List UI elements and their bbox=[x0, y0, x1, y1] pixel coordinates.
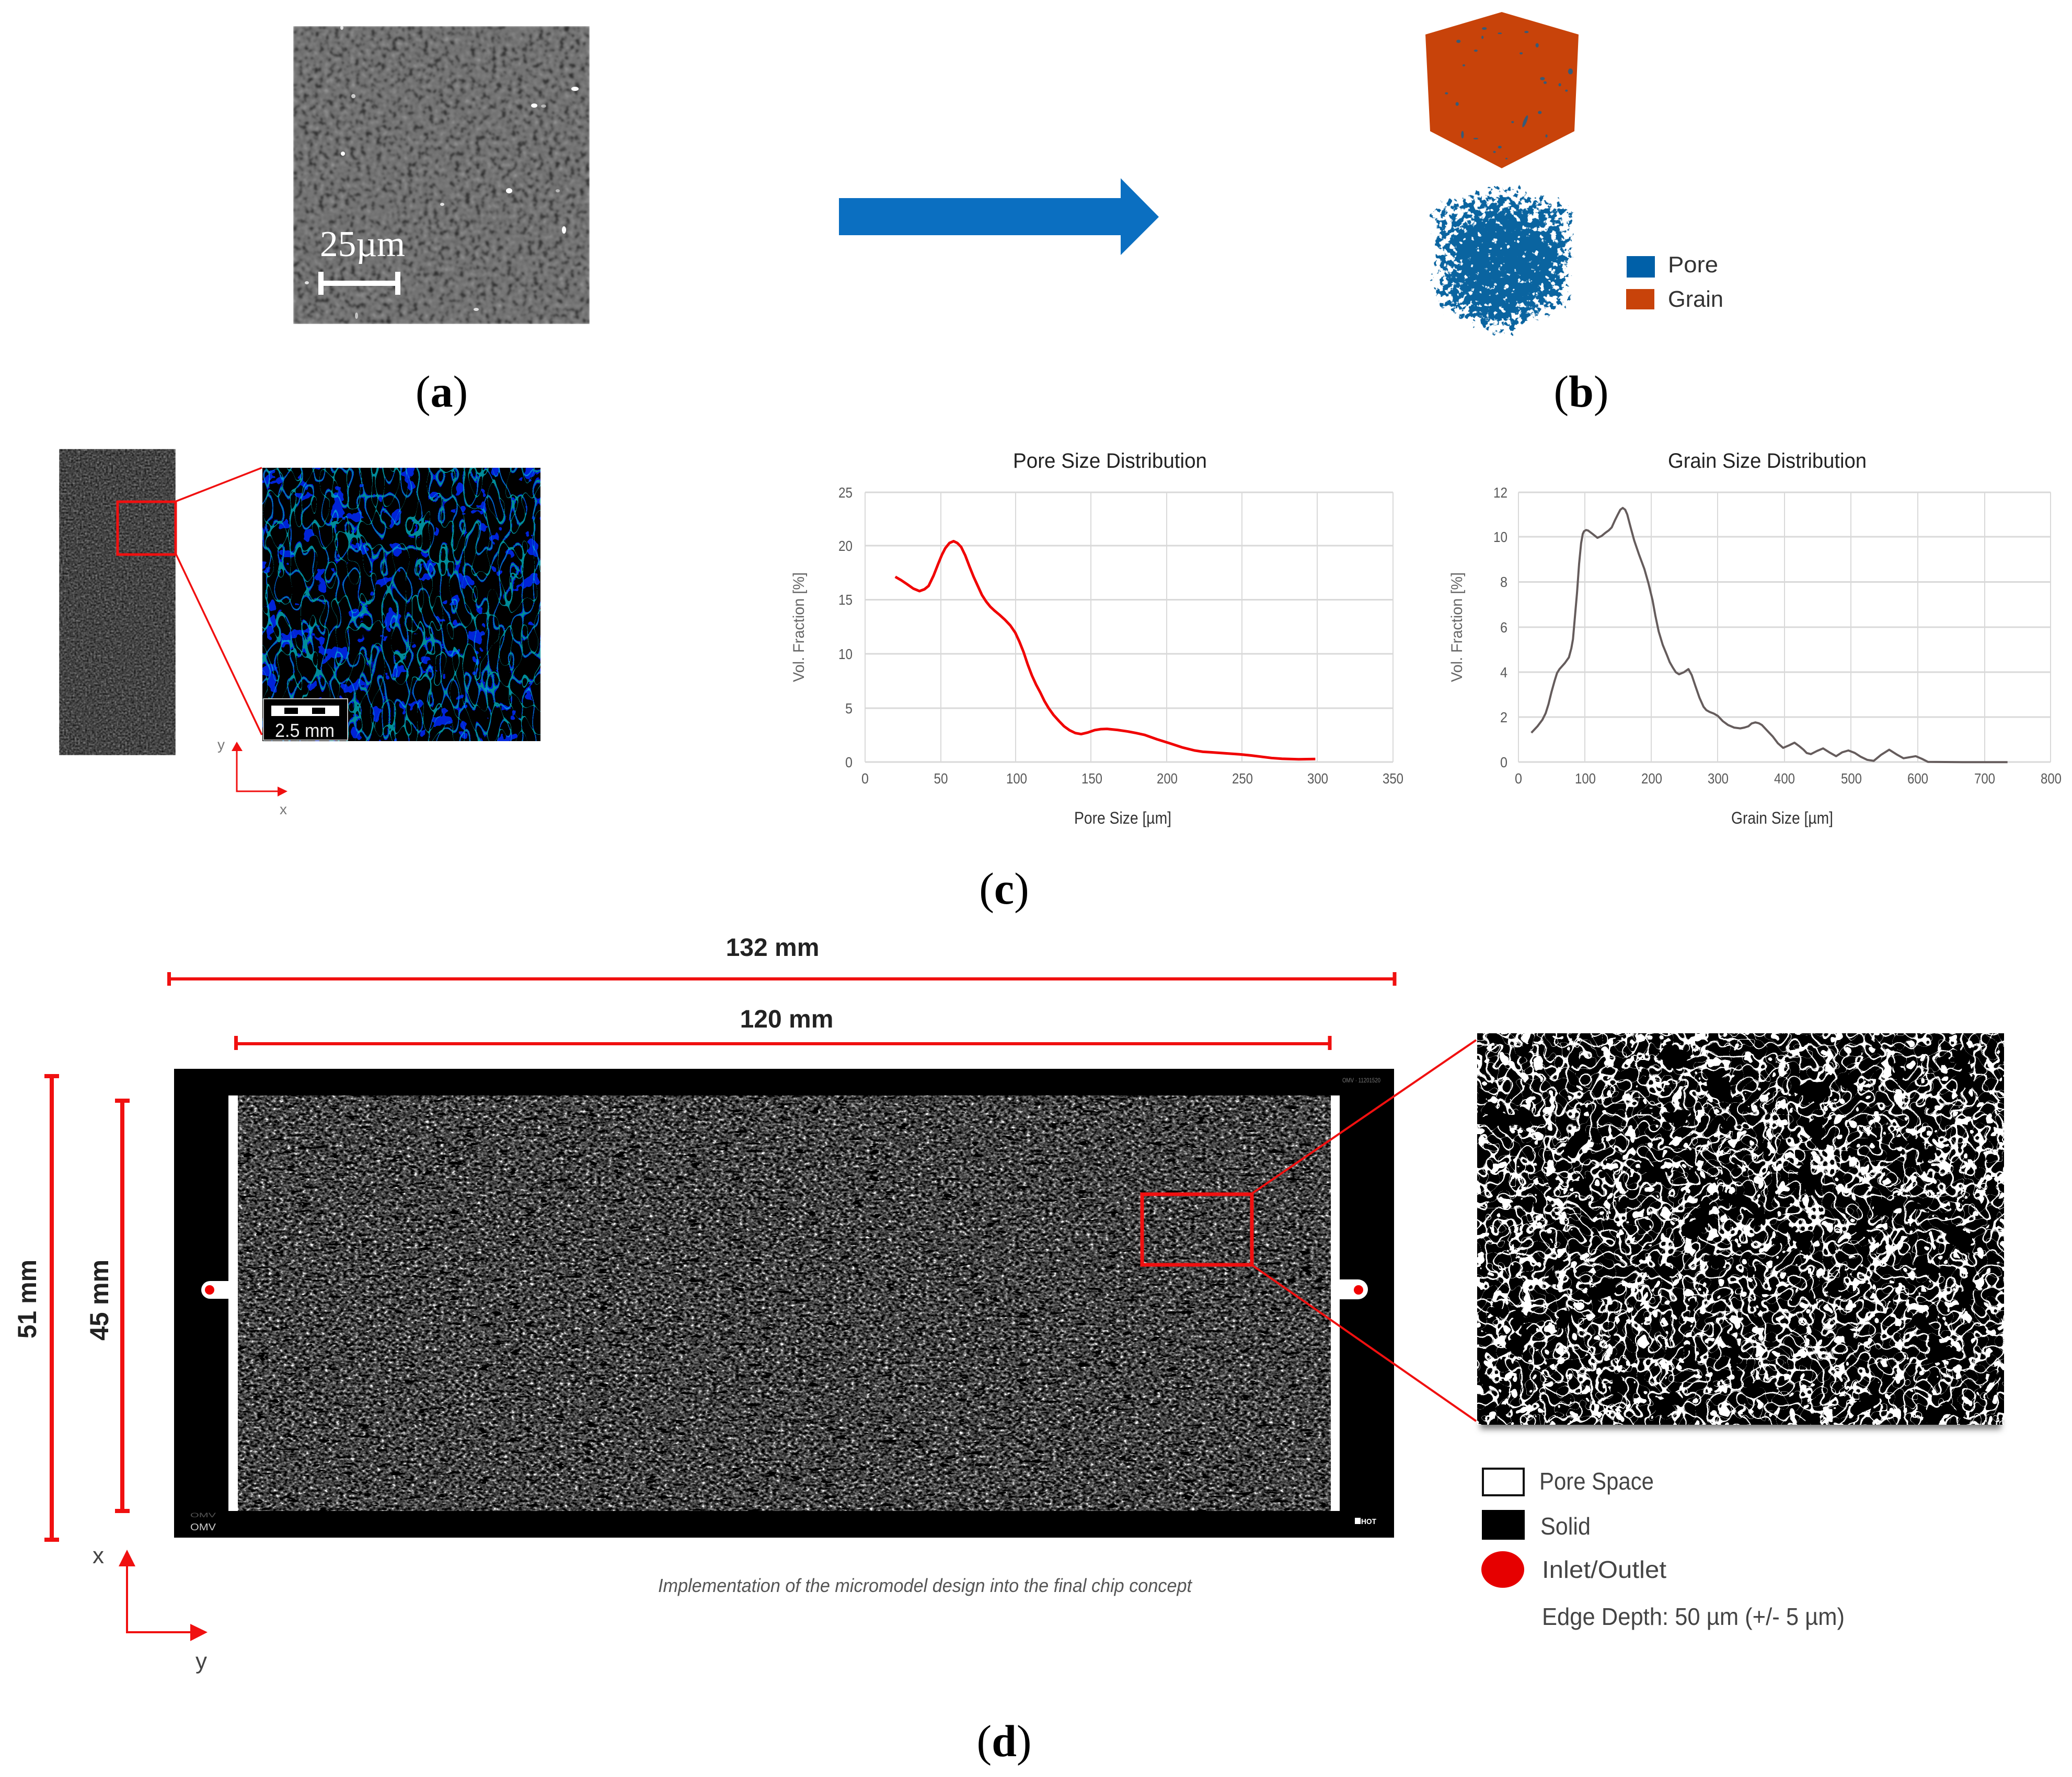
chip text marks: OMV bbox=[190, 1511, 216, 1519]
legend: pore, solid, inlet, edge depth: Solid bbox=[1540, 1513, 1591, 1540]
axes: x and y: y bbox=[217, 736, 225, 753]
panel: c, sample and flow network bbox=[59, 449, 2062, 914]
chart: grain size distribution: 400 bbox=[1774, 770, 1795, 787]
chart: pore size distribution: 0 bbox=[861, 770, 869, 787]
chart: grain size distribution: 0 bbox=[1500, 754, 1507, 770]
chart: grain size distribution: 600 bbox=[1907, 770, 1928, 787]
inlet channel with tab bbox=[201, 1095, 238, 1511]
chart: grain size distribution: 10 bbox=[1493, 529, 1507, 545]
chart: grain size distribution: 4 bbox=[1500, 664, 1507, 680]
panel: d, micromodel chip bbox=[13, 934, 2004, 1766]
chart: pore size distribution: 250 bbox=[1232, 770, 1253, 787]
chip design bbox=[174, 1069, 1394, 1538]
chart: grain size distribution: 12 bbox=[1493, 484, 1507, 501]
label (d): (d) bbox=[976, 1716, 1032, 1766]
axes: x and y: x bbox=[280, 801, 287, 817]
chart: grain size distribution: 500 bbox=[1841, 770, 1862, 787]
sample strip image bbox=[59, 449, 176, 755]
chart: pore size distribution bbox=[790, 449, 1403, 827]
chart: grain size distribution: 800 bbox=[2041, 770, 2062, 787]
legend: pore and grain bbox=[1626, 252, 1723, 312]
chart: pore size distribution: 350 bbox=[1383, 770, 1403, 787]
label (c): (c) bbox=[979, 863, 1029, 914]
chip text marks: OMV · 11201520 bbox=[1342, 1077, 1380, 1084]
legend: pore, solid, inlet, edge depth: Inlet/Outlet bbox=[1542, 1556, 1666, 1583]
chart: grain size distribution: Grain Size Distribution bbox=[1668, 449, 1867, 472]
outlet marker bbox=[1354, 1285, 1363, 1295]
scale bar: 25 micrometres bbox=[320, 224, 405, 295]
grain cube bbox=[1425, 12, 1579, 168]
zoom box and connector lines bbox=[1142, 1040, 1476, 1421]
zoom box and connector lines bbox=[118, 468, 262, 735]
caption: Implementation of the micromodel design into the final chip concept bbox=[658, 1575, 1193, 1596]
chart: grain size distribution: Vol. Fraction [%] bbox=[1448, 572, 1466, 682]
chart: pore size distribution: 50 bbox=[934, 770, 948, 787]
inset shadow bbox=[1480, 1420, 2001, 1429]
dimension: 51 mm: 51 mm bbox=[13, 1260, 42, 1338]
chip text marks bbox=[190, 1077, 1380, 1532]
chart: pore size distribution: 300 bbox=[1307, 770, 1328, 787]
chart: grain size distribution: 6 bbox=[1500, 619, 1507, 636]
label (a): (a) bbox=[416, 366, 468, 417]
inset zoomed pore structure bbox=[1477, 1033, 2004, 1425]
chart: pore size distribution: 10 bbox=[838, 646, 853, 662]
chart: grain size distribution bbox=[1448, 449, 2062, 827]
arrow: process direction bbox=[839, 178, 1159, 255]
axes: x and y: y bbox=[195, 1648, 207, 1674]
outlet channel with tab bbox=[1331, 1095, 1368, 1511]
scale bar: 2.5 mm: 2.5 mm bbox=[275, 720, 335, 741]
chart: grain size distribution: 700 bbox=[1974, 770, 1995, 787]
inlet marker bbox=[205, 1285, 214, 1295]
legend: pore, solid, inlet, edge depth: Pore Space bbox=[1539, 1468, 1654, 1495]
axes: x and y bbox=[217, 736, 287, 817]
dimension: 132 mm: 132 mm bbox=[726, 934, 819, 962]
dimension: 132 mm bbox=[168, 934, 1395, 986]
dimension: 45 mm bbox=[85, 1101, 130, 1511]
panel: a, SEM image bbox=[293, 26, 590, 417]
chart: pore size distribution: 5 bbox=[845, 700, 853, 717]
chip text marks: HOT bbox=[1361, 1517, 1376, 1526]
chart: grain size distribution: 8 bbox=[1500, 574, 1507, 590]
chart: pore size distribution: 20 bbox=[838, 538, 853, 554]
legend: pore and grain: Pore bbox=[1668, 252, 1718, 278]
chart: pore size distribution: 200 bbox=[1157, 770, 1178, 787]
chart: pore size distribution: 150 bbox=[1081, 770, 1102, 787]
legend: pore, solid, inlet, edge depth bbox=[1481, 1468, 1845, 1630]
dimension: 45 mm: 45 mm bbox=[85, 1260, 114, 1341]
chart: pore size distribution: 100 bbox=[1006, 770, 1027, 787]
panel: b, 3D model bbox=[1425, 12, 1723, 417]
SEM micrograph bbox=[293, 26, 590, 324]
scale bar: 2.5 mm bbox=[263, 699, 348, 741]
porous pattern bbox=[238, 1095, 1331, 1511]
legend: pore and grain: Grain bbox=[1668, 286, 1723, 312]
chip text marks: OMV bbox=[190, 1522, 216, 1532]
chart: grain size distribution: 2 bbox=[1500, 709, 1507, 725]
scale bar: 25 micrometres: 25µm bbox=[320, 224, 405, 264]
chart: grain size distribution: 0 bbox=[1515, 770, 1522, 787]
chart: pore size distribution: Pore Size [µm] bbox=[1074, 809, 1171, 827]
dimension: 120 mm bbox=[235, 1006, 1330, 1050]
axes: x and y: x bbox=[93, 1543, 104, 1568]
axes: x and y bbox=[93, 1543, 208, 1674]
pore network cloud bbox=[1428, 180, 1576, 342]
chart: grain size distribution: 300 bbox=[1708, 770, 1729, 787]
chart: grain size distribution: 200 bbox=[1641, 770, 1662, 787]
legend: pore, solid, inlet, edge depth: Edge Depth: 50 µm (+/- 5 µm) bbox=[1542, 1603, 1845, 1630]
flow network image bbox=[262, 468, 540, 741]
chart: grain size distribution: 100 bbox=[1575, 770, 1596, 787]
chart: pore size distribution: 15 bbox=[838, 592, 853, 608]
chart: pore size distribution: Vol. Fraction [%] bbox=[790, 572, 808, 682]
chart: pore size distribution: Pore Size Distribution bbox=[1013, 449, 1207, 472]
dimension: 120 mm: 120 mm bbox=[740, 1006, 833, 1033]
dimension: 51 mm bbox=[13, 1076, 59, 1540]
chart: grain size distribution: Grain Size [µm] bbox=[1731, 809, 1833, 827]
label (b): (b) bbox=[1553, 366, 1609, 417]
chart: pore size distribution: 25 bbox=[838, 484, 853, 501]
bright mineral specks bbox=[305, 26, 579, 319]
chart: pore size distribution: 0 bbox=[845, 754, 853, 770]
